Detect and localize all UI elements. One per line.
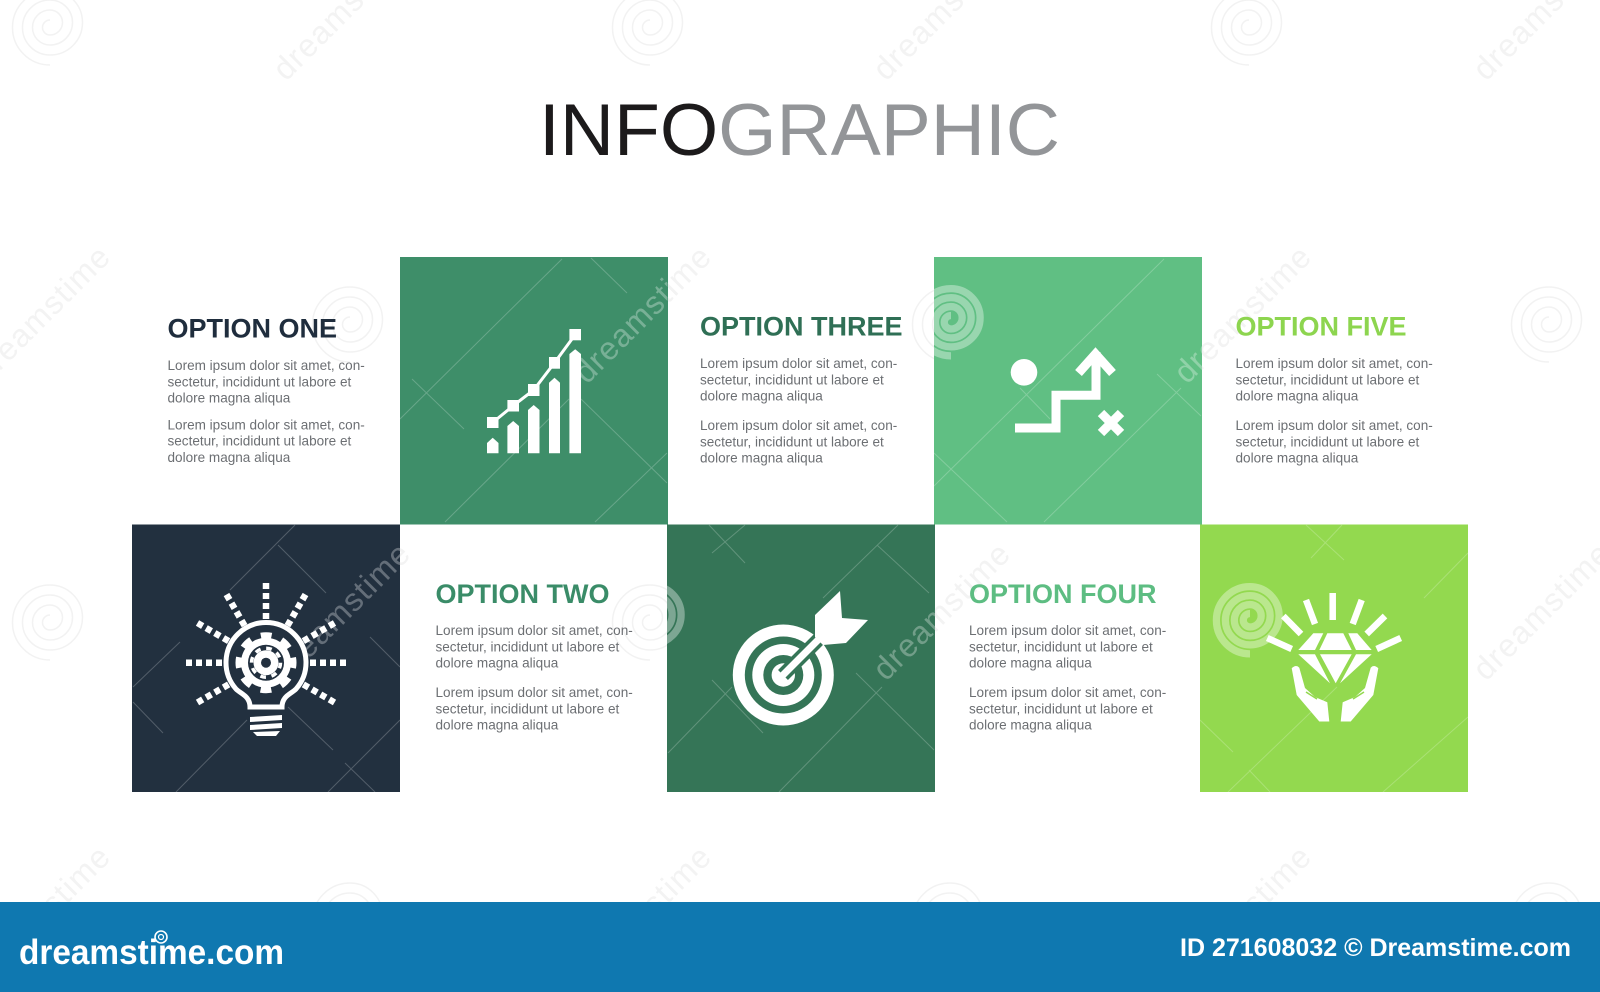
watermark text on white: dreamstime: [865, 536, 1017, 687]
body: option four: [969, 623, 1166, 733]
icon: light bulb with gear: [186, 583, 346, 736]
text: dreamstime: [1166, 239, 1318, 390]
body: option four: dolore magna aliqua: [969, 718, 1092, 733]
body: option five: dolore magna aliqua: [1236, 451, 1359, 466]
icon: target with arrow: [733, 591, 868, 726]
watermark text on white: dreamstime: [566, 839, 718, 990]
body: option four: sectetur, incididunt ut labore et: [969, 639, 1153, 654]
body: option one: [168, 358, 365, 465]
body: option one: dolore magna aliqua: [168, 391, 291, 406]
body: option three: sectetur, incididunt ut labore et: [700, 434, 884, 449]
body: option five: Lorem ipsum dolor sit amet, con-: [1236, 356, 1433, 371]
body: option five: dolore magna aliqua: [1236, 389, 1359, 404]
body: option two: [436, 623, 633, 733]
heading: option five: OPTION FIVE: [1236, 312, 1407, 342]
heading: option two: OPTION TWO: [436, 579, 609, 609]
body: option one: Lorem ipsum dolor sit amet, con-: [168, 358, 365, 373]
body: option three: Lorem ipsum dolor sit amet, con-: [700, 356, 897, 371]
body: option two: sectetur, incididunt ut labore et: [436, 701, 619, 716]
heading: option three: OPTION THREE: [700, 312, 903, 342]
footer logo: dreamstime.com: dreamstime.com: [19, 933, 284, 972]
icon: growth bar chart: [487, 329, 581, 453]
body: option two: dolore magna aliqua: [436, 656, 559, 671]
text block: option five: [1236, 312, 1433, 466]
panel: option three icon square: [400, 257, 668, 524]
panel: option two icon square: [667, 524, 935, 792]
body: option three: Lorem ipsum dolor sit amet, con-: [700, 418, 897, 433]
text block: option three: [700, 312, 903, 466]
body: option two: dolore magna aliqua: [436, 718, 559, 733]
body: option four: Lorem ipsum dolor sit amet, con-: [969, 685, 1166, 700]
body: option three: dolore magna aliqua: [700, 451, 823, 466]
panel: option one icon square: [132, 524, 400, 792]
heading: option one: OPTION ONE: [168, 314, 337, 344]
body: option one: Lorem ipsum dolor sit amet, con-: [168, 417, 365, 432]
body: option two: Lorem ipsum dolor sit amet, con-: [436, 623, 633, 638]
icon: diamond in hands: [1267, 593, 1401, 722]
text block: option one: [168, 314, 365, 465]
text: dreamstime: [566, 239, 718, 390]
watermark text on white: dreamstime: [265, 536, 417, 687]
body: option two: sectetur, incididunt ut labore et: [436, 639, 619, 654]
icon: stairs with arrow, ball and cross: [1011, 352, 1121, 433]
body: option three: sectetur, incididunt ut labore et: [700, 372, 884, 387]
body: option four: dolore magna aliqua: [969, 656, 1092, 671]
watermark text on white: dreamstime: [566, 239, 718, 390]
heading: option four: OPTION FOUR: [969, 579, 1156, 609]
watermark text on white: dreamstime: [1166, 239, 1318, 390]
text: dreamstime: [265, 536, 417, 687]
body: option five: Lorem ipsum dolor sit amet, con-: [1236, 418, 1433, 433]
footer band: [0, 902, 1600, 992]
body: option one: dolore magna aliqua: [168, 450, 291, 465]
body: option one: sectetur, incididunt ut labore et: [168, 434, 351, 449]
body: option five: [1236, 356, 1433, 466]
body: option three: [700, 356, 897, 466]
body: option two: Lorem ipsum dolor sit amet, con-: [436, 685, 633, 700]
body: option five: sectetur, incididunt ut labore et: [1236, 372, 1419, 387]
title: INFOGRAPHIC: [539, 90, 1060, 171]
body: option four: sectetur, incididunt ut labore et: [969, 701, 1153, 716]
watermark text on white: dreamstime: [1166, 839, 1318, 990]
body: option five: sectetur, incididunt ut labore et: [1236, 434, 1419, 449]
body: option one: sectetur, incididunt ut labore et: [168, 374, 351, 389]
footer image id: ID 271608032 © Dreamstime.com: [1180, 934, 1571, 962]
body: option three: dolore magna aliqua: [700, 389, 823, 404]
panel: option five icon square: [1200, 524, 1468, 792]
text: dreamstime: [865, 536, 1017, 687]
text block: option two: [436, 579, 633, 733]
panel: option four icon square: [934, 257, 1202, 524]
text block: option four: [969, 579, 1166, 733]
body: option four: Lorem ipsum dolor sit amet, con-: [969, 623, 1166, 638]
